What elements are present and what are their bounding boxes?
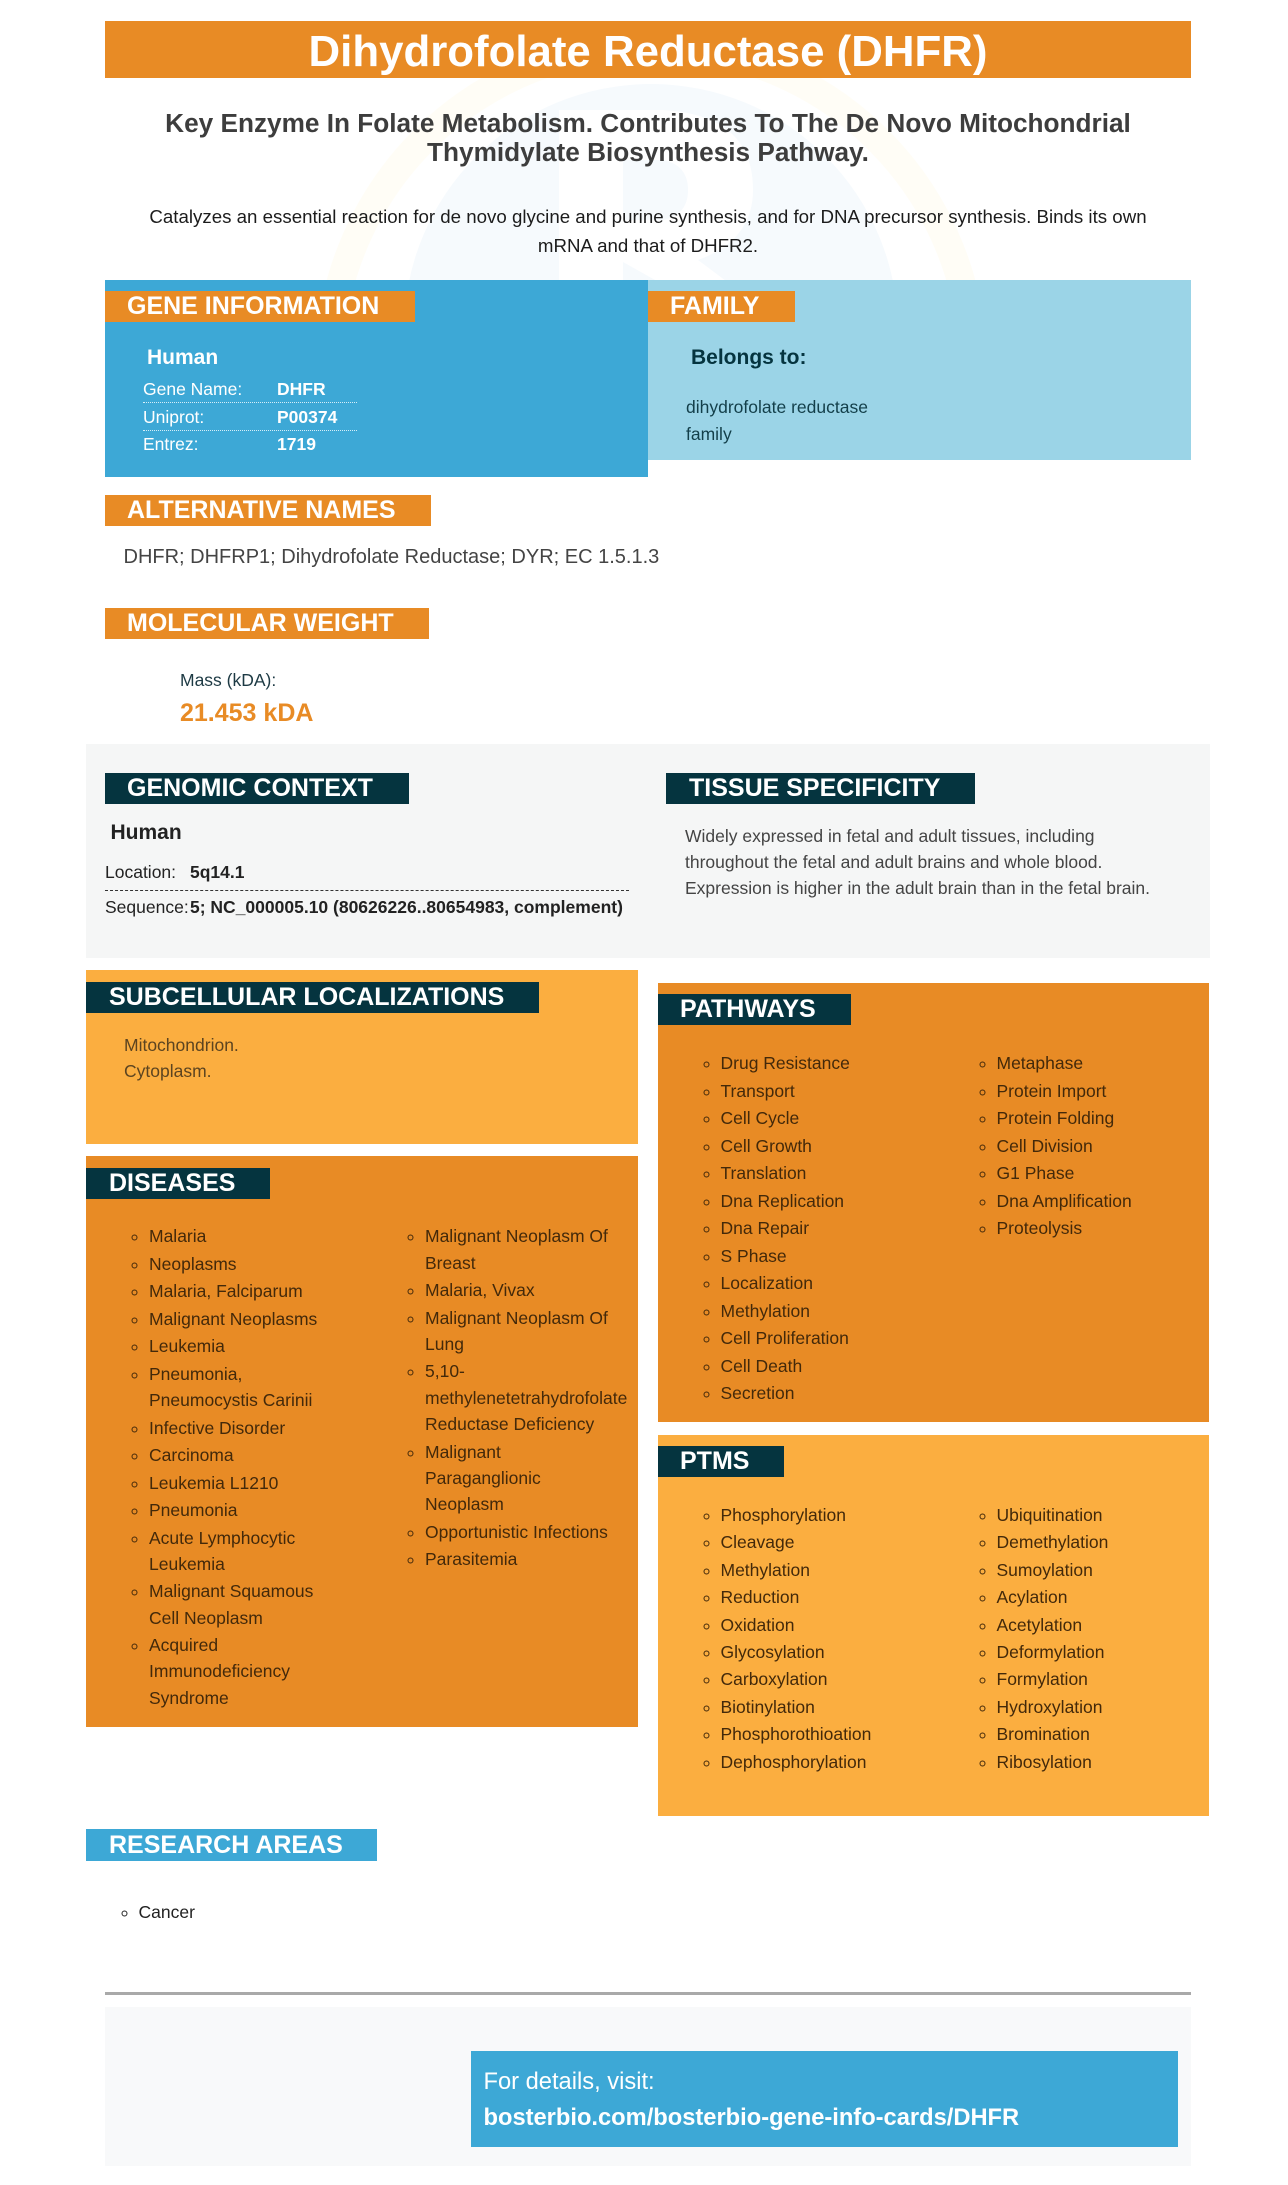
pathways list column 1: Cell Death — [720, 1356, 802, 1376]
diseases list column 1: Leukemia — [149, 1554, 225, 1574]
watermark logo — [327, 78, 975, 280]
diseases list column 2: Malignant — [425, 1442, 501, 1462]
ptms list column 2: Ubiquitination — [996, 1505, 1103, 1525]
diseases list column 2: Parasitemia — [425, 1549, 517, 1569]
heading: diseases — [86, 1168, 270, 1199]
subtitle: Key Enzyme In Folate Metabolism. Contributes To The De Novo Mitochondrial — [165, 108, 1131, 138]
diseases list column 1: Pneumocystis Carinii — [149, 1390, 312, 1410]
ptms list column 1: Carboxylation — [720, 1669, 828, 1689]
ptms list column 2: Acylation — [996, 1587, 1068, 1607]
diseases list column 1: Syndrome — [149, 1688, 229, 1708]
diseases list column 2: 5,10- — [425, 1361, 465, 1381]
localization text: Cytoplasm. — [124, 1061, 212, 1081]
heading: family — [648, 291, 795, 322]
panel: subcellular localizations — [86, 970, 638, 1144]
title — [105, 21, 1191, 78]
heading: family: FAMILY — [670, 292, 759, 320]
panel: diseases — [86, 1156, 638, 1727]
pathways list column 2: Protein Import — [996, 1080, 1106, 1100]
dashed divider and sequence: 5; NC_000005.10 (80626226..80654983, complement) — [190, 897, 623, 917]
callout url: bosterbio.com/bosterbio-gene-info-cards/DHFR — [484, 2105, 1019, 2131]
belongs to label: Belongs to: — [691, 346, 806, 369]
family text: dihydrofolate reductase — [686, 397, 868, 417]
panel: family — [648, 280, 1191, 460]
pathways list column 1: Cell Proliferation — [720, 1328, 849, 1348]
diseases list column 2: Breast — [425, 1253, 476, 1273]
ptms list column 2: Ribosylation — [996, 1752, 1092, 1772]
gene name row — [143, 375, 357, 403]
ptms list column 2: Deformylation — [996, 1642, 1104, 1662]
family text: family — [686, 424, 732, 444]
diseases list column 2 — [408, 1226, 627, 1569]
diseases list column 1: Leukemia L1210 — [149, 1473, 278, 1493]
diseases list column 1: Malaria, Falciparum — [149, 1281, 303, 1301]
mass value: 21.453 kDA — [180, 699, 313, 727]
diseases list column 2: methylenetetrahydrofolate — [425, 1388, 627, 1408]
pathways list column 1: Dna Repair — [720, 1218, 809, 1238]
panel: gene information — [105, 280, 648, 477]
ptms list column 1: Dephosphorylation — [720, 1752, 866, 1772]
pathways list column 1: Cell Cycle — [720, 1108, 799, 1128]
pathways list column 2: G1 Phase — [996, 1163, 1074, 1183]
ptms list column 1: Biotinylation — [720, 1697, 815, 1717]
pathways list column 1: Localization — [720, 1273, 813, 1293]
ptms list column 2: Hydroxylation — [996, 1697, 1103, 1717]
pathways list column 1 — [704, 1053, 850, 1403]
heading: genomic context: GENOMIC CONTEXT — [127, 774, 373, 802]
ptms list column 2: Formylation — [996, 1669, 1088, 1689]
heading: gene information: GENE INFORMATION — [127, 292, 379, 320]
diseases list column 1: Malaria — [149, 1226, 206, 1246]
gene name row: Gene Name: — [143, 379, 242, 399]
ptms list column 1: Reduction — [720, 1587, 799, 1607]
diseases list column 1: Infective Disorder — [149, 1418, 285, 1438]
diseases list column 2: Opportunistic Infections — [425, 1522, 608, 1542]
callout label: For details, visit: — [484, 2069, 655, 2095]
diseases list column 2: Neoplasm — [425, 1494, 504, 1514]
uniprot row — [143, 403, 357, 431]
callout: details link — [471, 2051, 1178, 2147]
ptms list column 1: Methylation — [720, 1560, 810, 1580]
ptms list column 2: Acetylation — [996, 1615, 1082, 1635]
pathways list column 1: Cell Growth — [720, 1136, 812, 1156]
location — [105, 862, 244, 882]
diseases list column 1: Neoplasms — [149, 1254, 237, 1274]
ptms list column 2: Bromination — [996, 1724, 1090, 1744]
pathways list column 1: S Phase — [720, 1246, 787, 1266]
tissue text: Widely expressed in fetal and adult tissues, including — [685, 826, 1095, 846]
heading: pathways: PATHWAYS — [680, 995, 816, 1023]
diseases list column 2: Lung — [425, 1334, 464, 1354]
pathways list column 2: Protein Folding — [996, 1108, 1114, 1128]
dashed divider and sequence: Sequence: — [105, 897, 189, 917]
heading: molecular weight: MOLECULAR WEIGHT — [127, 609, 394, 637]
pathways list column 1: Secretion — [720, 1383, 794, 1403]
pathways list column 2: Proteolysis — [996, 1218, 1082, 1238]
entrez row: Entrez: — [143, 434, 198, 454]
gene name row: DHFR — [277, 379, 326, 399]
description: mRNA and that of DHFR2. — [538, 235, 758, 256]
ptms list column 2: Sumoylation — [996, 1560, 1093, 1580]
pathways list column 1: Methylation — [720, 1300, 810, 1320]
panel: genomic context and tissue specificity: 5q14.1 — [190, 862, 244, 882]
heading: alternative names: ALTERNATIVE NAMES — [127, 496, 396, 524]
pathways list column 2: Cell Division — [996, 1136, 1093, 1156]
entrez row — [143, 434, 316, 454]
ptms list column 2 — [980, 1505, 1108, 1772]
pathways list column 2 — [980, 1053, 1132, 1238]
species label: Human — [110, 821, 182, 844]
alternative names text: DHFR; DHFRP1; Dihydrofolate Reductase; DYR; EC 1.5.1.3 — [124, 546, 659, 568]
tissue text: throughout the fetal and adult brains and whole blood. — [685, 852, 1102, 872]
heading: pathways — [658, 994, 851, 1025]
ptms list column 1: Oxidation — [720, 1615, 794, 1635]
diseases list column 1: Pneumonia — [149, 1500, 238, 1520]
diseases list column 1: Acute Lymphocytic — [149, 1528, 295, 1548]
title: Dihydrofolate Reductase (DHFR) — [309, 27, 987, 76]
pathways list column 1: Dna Replication — [720, 1190, 844, 1210]
heading: diseases: DISEASES — [109, 1169, 235, 1197]
ptms list column 1: Cleavage — [720, 1532, 794, 1552]
diseases list column 1: Pneumonia, — [149, 1364, 242, 1384]
location: Location: — [105, 862, 176, 882]
ptms list column 1: Glycosylation — [720, 1642, 825, 1662]
footer panel — [105, 2007, 1191, 2166]
diseases list column 2: Malignant Neoplasm Of — [425, 1226, 608, 1246]
entrez row: 1719 — [277, 434, 316, 454]
heading: ptms: PTMS — [680, 1447, 749, 1475]
diseases list column 2: Malaria, Vivax — [425, 1280, 535, 1300]
description: Catalyzes an essential reaction for de novo glycine and purine synthesis, and for DNA precursor synthesis. Binds its own — [149, 206, 1147, 227]
localization text — [124, 1035, 239, 1081]
ptms list column 1: Phosphorothioation — [720, 1724, 871, 1744]
research areas list: Cancer — [138, 1902, 195, 1922]
mass label: Mass (kDA): — [180, 670, 276, 690]
uniprot row: Uniprot: — [143, 407, 204, 427]
diseases list column 1: Immunodeficiency — [149, 1661, 290, 1681]
heading: tissue specificity: TISSUE SPECIFICITY — [689, 774, 940, 802]
diseases list column 1: Carcinoma — [149, 1445, 234, 1465]
panel: pathways — [658, 983, 1209, 1422]
pathways list column 2: Dna Amplification — [996, 1190, 1132, 1210]
pathways list column 1: Transport — [720, 1080, 795, 1100]
pathways list column 2: Metaphase — [996, 1053, 1083, 1073]
subtitle — [165, 108, 1131, 167]
diseases list column 1: Malignant Squamous — [149, 1581, 313, 1601]
diseases list column 1: Cell Neoplasm — [149, 1608, 263, 1628]
diseases list column 2: Paraganglionic — [425, 1468, 541, 1488]
heading: subcellular localizations: SUBCELLULAR LOCALIZATIONS — [109, 983, 504, 1011]
heading: ptms — [658, 1446, 784, 1477]
dashed divider and sequence — [105, 890, 629, 921]
ptms list column 1 — [704, 1505, 871, 1772]
ptms list column 1: Phosphorylation — [720, 1505, 846, 1525]
diseases list column 2: Reductase Deficiency — [425, 1414, 594, 1434]
diseases list column 1 — [132, 1226, 317, 1708]
description — [149, 206, 1147, 256]
panel: ptms — [658, 1435, 1209, 1816]
diseases list column 1: Acquired — [149, 1635, 218, 1655]
localization text: Mitochondrion. — [124, 1035, 239, 1055]
diseases list column 2: Malignant Neoplasm Of — [425, 1308, 608, 1328]
diseases list column 1: Leukemia — [149, 1336, 225, 1356]
pathways list column 1: Drug Resistance — [720, 1053, 850, 1073]
tissue text — [685, 826, 1150, 898]
pathways list column 1: Translation — [720, 1163, 806, 1183]
heading: research areas: RESEARCH AREAS — [109, 1831, 343, 1859]
diseases list column 1: Malignant Neoplasms — [149, 1309, 317, 1329]
species label: Human — [147, 346, 218, 369]
uniprot row: P00374 — [277, 407, 337, 427]
subtitle: Thymidylate Biosynthesis Pathway. — [427, 137, 869, 167]
ptms list column 2: Demethylation — [996, 1532, 1108, 1552]
panel: genomic context and tissue specificity — [86, 744, 1210, 958]
tissue text: Expression is higher in the adult brain than in the fetal brain. — [685, 878, 1150, 898]
family text — [686, 397, 868, 444]
